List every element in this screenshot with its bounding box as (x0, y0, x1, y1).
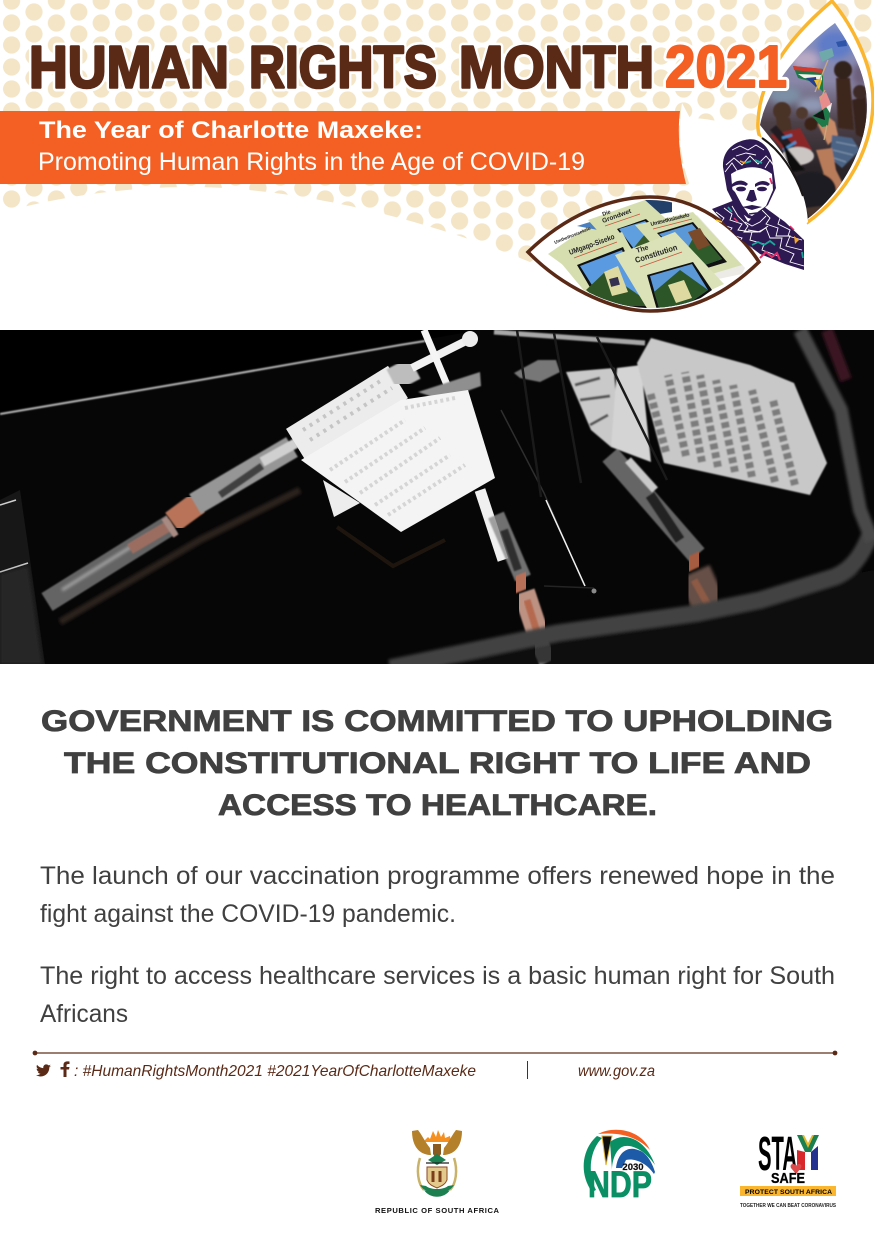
footer divider line (33, 1051, 837, 1055)
right blurred label papers (566, 338, 827, 495)
logo: NDP 2030 (584, 1130, 655, 1205)
logo: coat of arms (412, 1130, 462, 1197)
logo: NDP 2030: NDP (588, 1164, 652, 1205)
book: Umtsetfosisekelo: Umtsetfosisekelo (650, 212, 691, 228)
book: Die Grondwet: Die (602, 209, 612, 218)
main heading: GOVERNMENT IS COMMITTED TO UPHOLDING (41, 705, 833, 738)
footer separator (526, 1061, 528, 1079)
logo: NDP 2030: 2030 (622, 1162, 644, 1173)
logo caption: REPUBLIC OF SOUTH AFRICA (375, 1206, 500, 1215)
book: Die Grondwet: Grondwet (601, 208, 633, 225)
main heading: THE CONSTITUTIONAL RIGHT TO LIFE AND (64, 747, 811, 780)
logo: Stay Safe (740, 1128, 836, 1209)
title: Human Rights Month 2021: MONTH (459, 35, 654, 101)
title: Human Rights Month 2021: HUMAN (29, 35, 229, 101)
banner heading: The Year of Charlotte Maxeke: (39, 117, 423, 144)
title: Human Rights Month 2021: RIGHTS (249, 35, 437, 101)
vertical black rods (517, 330, 667, 497)
banner subheading: Promoting Human Rights in the Age of COVID-19 (38, 148, 585, 176)
body paragraph: right to healthcare: Africans (40, 1000, 128, 1028)
book: uMgaqo-Sisekho: UMgaqo-Siseko (568, 232, 616, 257)
illustrated portrait of Charlotte Maxeke (712, 139, 804, 270)
body paragraph: vaccination programme: The launch of our vaccination programme offers renewed hope in the (40, 862, 835, 890)
white syringe label card (301, 390, 495, 532)
portrait body and shawl (712, 200, 804, 270)
logo: Stay Safe: STA (758, 1128, 797, 1181)
vaccine photo (0, 330, 874, 668)
book: The Constitution: The (635, 244, 650, 255)
website: www.gov.za (578, 1063, 655, 1080)
shelf highlights and tray glass (0, 332, 645, 664)
orange banner (0, 111, 686, 184)
logo: Stay Safe: PROTECT SOUTH AFRICA (745, 1189, 832, 1196)
book: uMgaqo-Sisekho (562, 232, 647, 308)
dark tray frame (390, 330, 874, 668)
body paragraph: right to healthcare (40, 962, 835, 1028)
title: Human Rights Month 2021 (29, 34, 787, 101)
portrait headwrap and face (723, 139, 776, 219)
hashtags: : #HumanRightsMonth2021 #2021YearOfCharlotteMaxeke (74, 1063, 476, 1080)
header dot pattern background (0, 0, 874, 262)
body paragraph: right to healthcare: The right to access healthcare services is a basic human right for South (40, 962, 835, 990)
book: The Constitution (615, 232, 724, 310)
book: back left: Umthethosisekelo (554, 226, 592, 245)
body paragraph: vaccination programme (40, 862, 835, 928)
title: Human Rights Month 2021: RIGHTS (249, 35, 437, 101)
title: Human Rights Month 2021: 2021 (665, 34, 787, 100)
book: Umtsetfosisekelo (635, 212, 745, 282)
centre syringe (480, 490, 548, 662)
logo: Stay Safe: TOGETHER WE CAN BEAT CORONAVIRUS (740, 1203, 836, 1209)
book: The Constitution: Constitution (634, 243, 679, 265)
book: Die Grondwet (588, 200, 666, 249)
title: Human Rights Month 2021: MONTH (459, 35, 654, 101)
body paragraph: vaccination programme: fight against the COVID-19 pandemic. (40, 900, 456, 928)
book: dark cover at top (644, 200, 672, 214)
icon: facebook (60, 1061, 70, 1077)
white leaf behind portrait (680, 103, 808, 262)
left syringe (47, 330, 481, 602)
main heading: ACCESS TO HEALTHCARE. (218, 789, 657, 822)
leaf with constitution books (528, 196, 759, 311)
icon: twitter (36, 1064, 51, 1076)
title: Human Rights Month 2021: 2021 (665, 34, 787, 100)
title: Human Rights Month 2021: HUMAN (29, 35, 229, 101)
yellow leaf with crowd photo (750, 1, 873, 225)
dark arc between portrait and crowd (762, 138, 803, 196)
book: back left (548, 222, 604, 264)
main heading (41, 705, 833, 822)
small South African flags (793, 40, 847, 140)
right syringe (610, 455, 712, 612)
logo: Stay Safe: SAFE (771, 1171, 805, 1187)
